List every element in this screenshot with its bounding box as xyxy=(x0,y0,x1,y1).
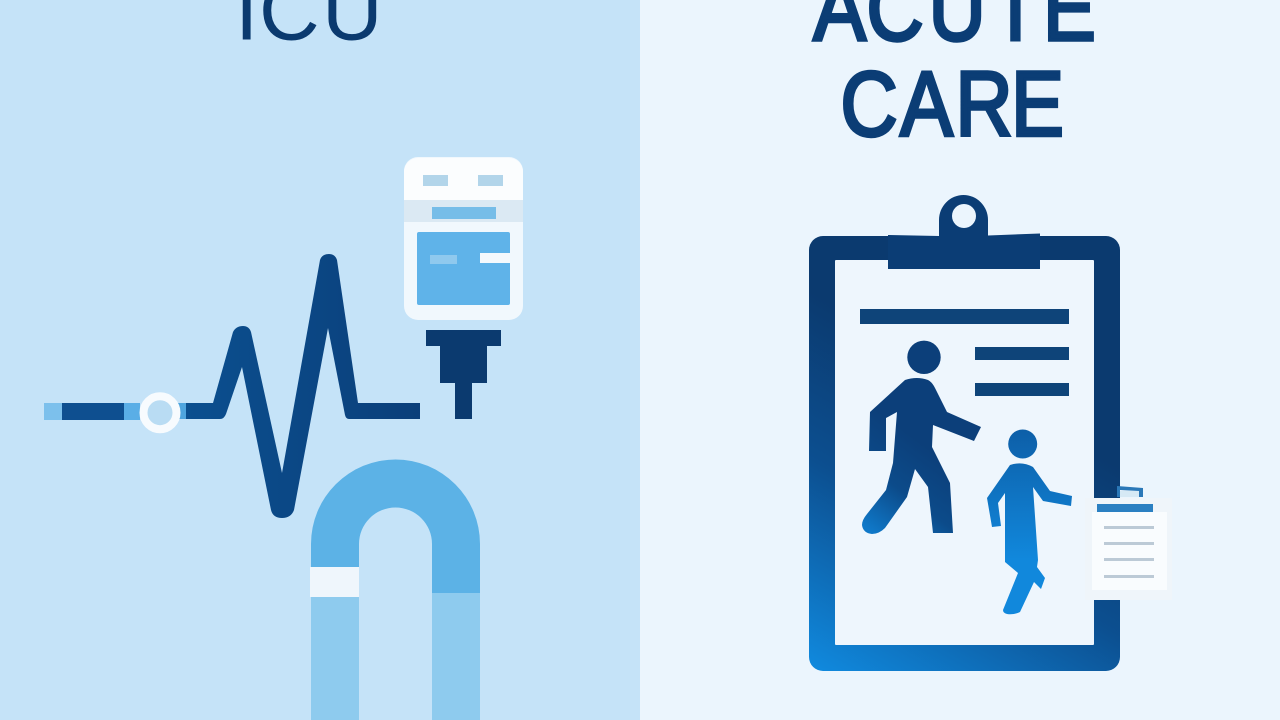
text lines xyxy=(860,309,1069,396)
icon: tube xyxy=(310,460,480,720)
icon: small note xyxy=(1085,486,1172,600)
icon: child walking xyxy=(987,430,1072,614)
icon: adult walking xyxy=(862,341,981,534)
icon: IV bag xyxy=(404,157,523,419)
heading: acute care: CARE xyxy=(841,53,1064,156)
panel: acute care xyxy=(640,0,1280,720)
heading: acute care xyxy=(813,0,1096,156)
icon: clipboard xyxy=(809,195,1172,671)
chart: heartbeat line xyxy=(44,254,420,518)
panel: ICU xyxy=(0,0,640,720)
